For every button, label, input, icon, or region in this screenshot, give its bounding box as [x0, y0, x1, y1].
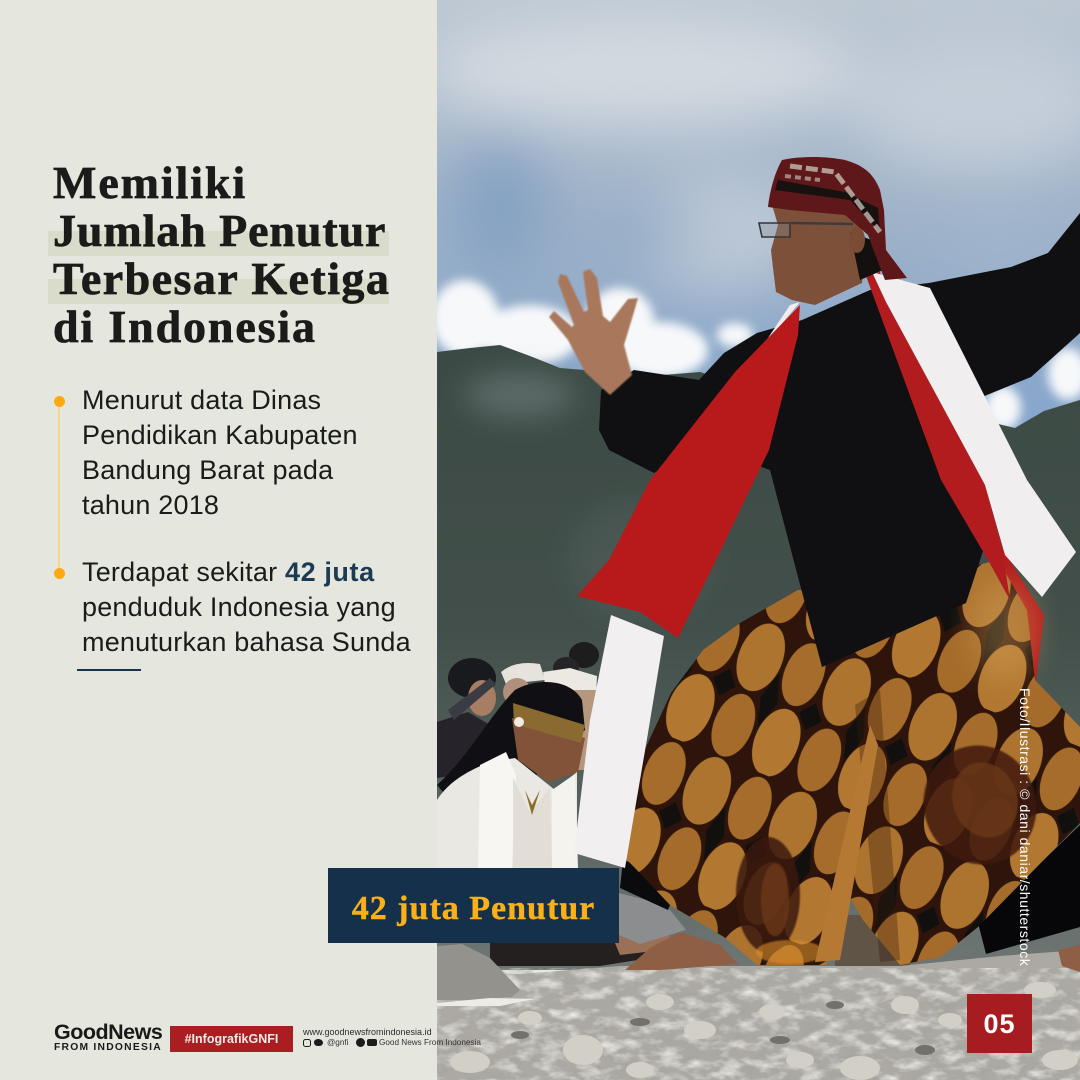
page number: 05: [983, 1009, 1016, 1039]
sarong front fold: [815, 725, 878, 962]
red scarf lower part behind sarong: [960, 485, 1044, 682]
bullet text 1: Menurut data Dinas: [82, 385, 321, 415]
bullet text 2: [82, 557, 411, 657]
bullet text 2: menuturkan bahasa Sunda: [82, 627, 411, 657]
icon: facebook: [356, 1038, 365, 1047]
bullet dot 2: [54, 568, 64, 578]
bullet text 1: tahun 2018: [82, 490, 219, 520]
social handles: [303, 1038, 481, 1047]
photo credit: Foto/Ilustrasi : © dani daniar/shutterstock: [1017, 688, 1033, 966]
white scarf sliver on left shoulder: [700, 302, 800, 440]
red scarf on left side: [577, 305, 800, 638]
white scarf on right shoulder: [872, 272, 1076, 597]
title: di Indonesia: [53, 301, 317, 352]
black shirt and sleeves: [599, 213, 1080, 667]
black trousers on right: [978, 825, 1080, 954]
head: [759, 157, 907, 305]
bullet text 2: penduduk Indonesia yang: [82, 592, 396, 622]
icon: instagram: [303, 1039, 311, 1047]
raised hand: [549, 269, 638, 395]
website: www.goodnewsfromindonesia.id: [303, 1027, 432, 1037]
bullet text 2: Terdapat sekitar 42 juta: [82, 557, 375, 587]
forested mountain: [437, 345, 1080, 970]
callout: 42 juta Penutur: 42 juta Penutur: [352, 890, 595, 927]
bullet dot 1: [54, 396, 64, 406]
handle text: @gnfi: [327, 1038, 349, 1047]
timeline connector: [58, 401, 60, 573]
logo: GoodNews from Indonesia: FROM INDONESIA: [54, 1042, 162, 1053]
title: Terbesar Ketiga: [53, 253, 390, 304]
bullet text 1: Bandung Barat pada: [82, 455, 333, 485]
seated legs under callout: [490, 893, 686, 966]
black patch under sarong: [620, 860, 680, 910]
callout: 42 juta Penutur: [328, 868, 619, 943]
channel text: Good News From Indonesia: [379, 1038, 481, 1047]
paper on ground: [437, 998, 535, 1006]
title: Memiliki: [53, 157, 247, 208]
ground: gravel: [437, 950, 1080, 1080]
foreground rock: [437, 944, 520, 1000]
dancer's feet: [625, 932, 1080, 972]
phoenix motifs: [736, 729, 1053, 953]
mist on mountain: [465, 373, 710, 620]
icon: youtube: [367, 1039, 377, 1046]
short rule: [77, 669, 141, 671]
hashtag badge: [170, 1026, 293, 1052]
sky: [437, 0, 1080, 480]
hashtag badge: #InfografikGNFI: [185, 1032, 278, 1046]
page number: [967, 994, 1032, 1053]
seated people in background: [437, 642, 599, 778]
panel: photo of Sundanese dancer: [437, 0, 1080, 1080]
white scarf hanging: [574, 615, 664, 868]
logo: GoodNews from Indonesia: GoodNews: [54, 1020, 162, 1044]
red scarf front strip: [866, 272, 1010, 600]
highlight bars behind title: [48, 231, 389, 304]
title: Jumlah Penutur: [53, 205, 386, 256]
title: [53, 157, 390, 352]
low white clouds: [431, 280, 1080, 430]
high clouds: [420, 15, 1080, 290]
batik sarong: [607, 560, 1080, 965]
equipment behind sarong: [835, 915, 910, 968]
sunlit fabric highlights: [971, 580, 1039, 680]
icon: twitter: [314, 1039, 323, 1046]
bullet text 1: [82, 385, 358, 520]
bullet text 1: Pendidikan Kabupaten: [82, 420, 358, 450]
seated man in white: [437, 682, 585, 868]
